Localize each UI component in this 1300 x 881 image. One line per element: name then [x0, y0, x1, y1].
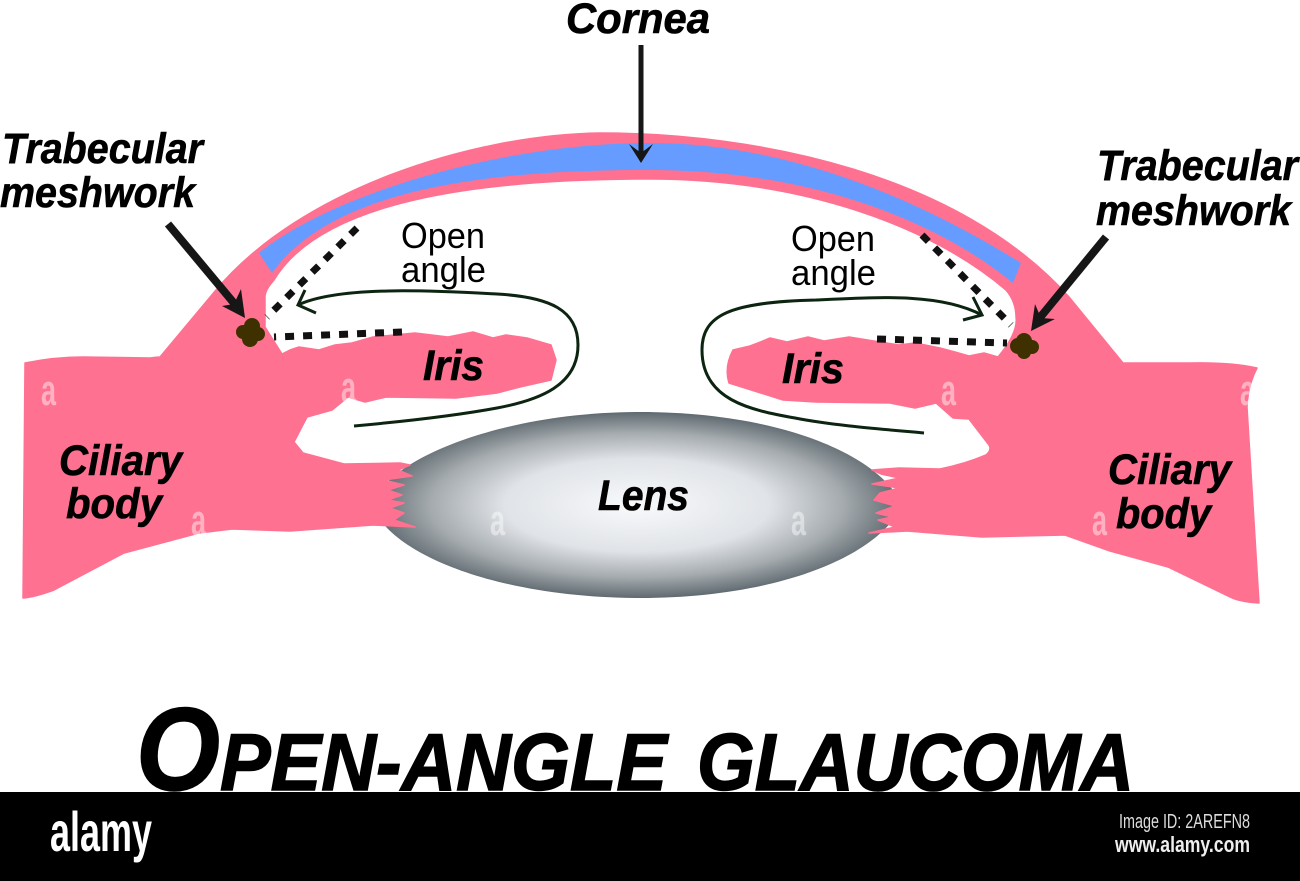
title: PEN-ANGLE — [220, 718, 670, 808]
left trabecular arrow — [168, 224, 245, 318]
watermark marks: a — [41, 366, 56, 415]
left trabecular meshwork label: meshwork — [0, 169, 197, 217]
right iris label: Iris — [782, 345, 844, 393]
alamy logo: alamy — [50, 800, 152, 863]
right aqueous flow arrow — [702, 297, 982, 433]
watermark marks: a — [1240, 366, 1255, 415]
left iris label: Iris — [423, 342, 484, 390]
right ciliary body label: body — [1116, 490, 1213, 538]
right trabecular meshwork blob — [1010, 333, 1039, 359]
image id: Image ID: 2AREFN8 — [1119, 811, 1250, 833]
cornea arrow — [629, 45, 653, 163]
watermark marks — [41, 363, 1255, 545]
left aqueous flow arrow — [298, 290, 578, 426]
right ciliary body label — [1108, 446, 1233, 538]
left trabecular meshwork blob — [236, 318, 265, 347]
watermark marks: a — [791, 496, 806, 545]
left open angle label — [401, 215, 486, 290]
watermark marks: a — [490, 496, 505, 545]
watermark marks: a — [1092, 496, 1107, 545]
right trabecular meshwork label — [1096, 142, 1300, 235]
right trabecular arrow — [1031, 237, 1106, 331]
left open angle dashed lines — [267, 228, 402, 337]
right open angle label: Open — [791, 218, 875, 259]
right ciliary body label: Ciliary — [1108, 446, 1233, 494]
eye tissue: sclera, iris and ciliary body — [23, 133, 1259, 603]
website: www.alamy.com — [1114, 832, 1250, 857]
left ciliary body label: Ciliary — [59, 437, 184, 485]
title — [136, 684, 1134, 816]
left ciliary body label — [59, 437, 184, 528]
right open angle label: angle — [791, 252, 876, 293]
lens — [372, 412, 902, 598]
left trabecular meshwork label — [0, 125, 205, 217]
right open angle label — [791, 218, 876, 293]
title: GLAUCOMA — [697, 718, 1134, 808]
left open angle label: Open — [401, 215, 485, 256]
cornea blue layer — [259, 143, 1021, 283]
footer bar — [0, 792, 1300, 881]
watermark marks: a — [191, 496, 206, 545]
left open angle label: angle — [401, 249, 486, 290]
lens label: Lens — [598, 472, 689, 520]
left ciliary body label: body — [66, 480, 164, 528]
watermark marks: a — [941, 366, 956, 415]
left trabecular meshwork label: Trabecular — [2, 125, 205, 173]
title: O — [136, 684, 220, 816]
watermark marks: a — [341, 363, 356, 412]
right open angle dashed lines — [877, 235, 1011, 343]
